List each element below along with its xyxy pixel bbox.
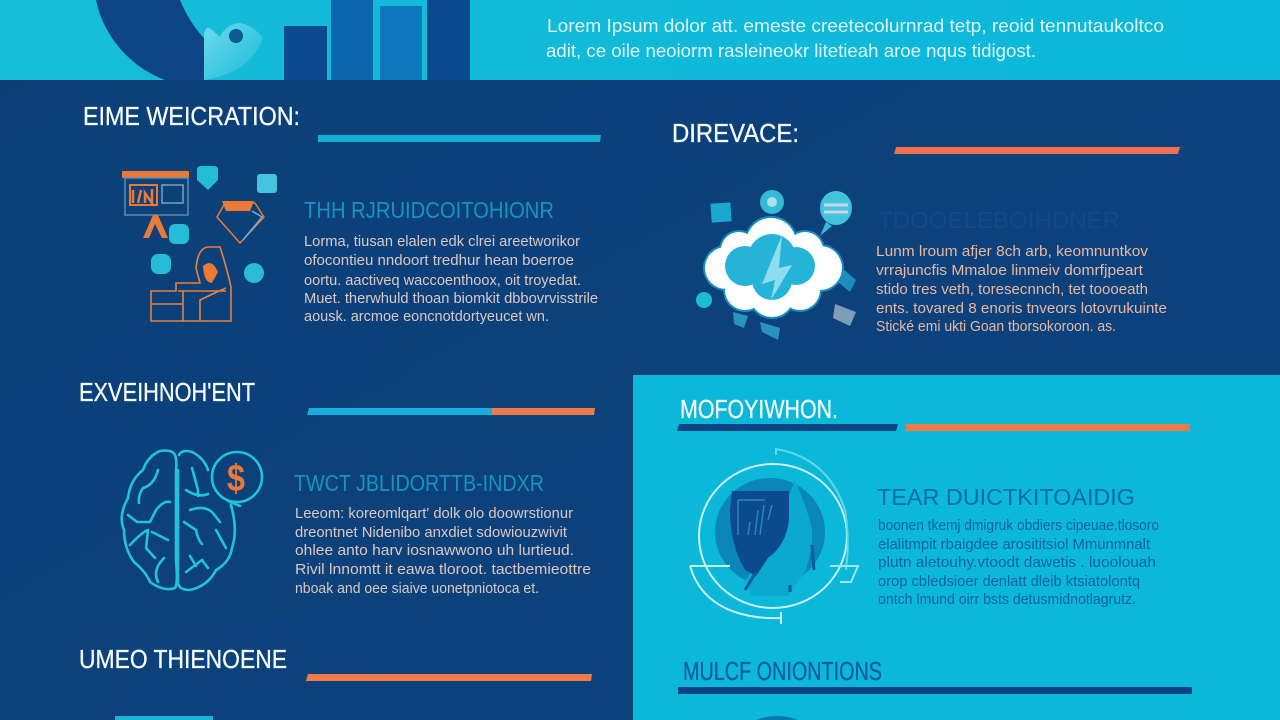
cropped bar at bottom bbox=[115, 716, 213, 720]
icon: presentation and desk bbox=[122, 166, 277, 321]
icon: brain with dollar badge bbox=[122, 450, 262, 590]
heading rule bbox=[894, 147, 1180, 154]
body text bbox=[295, 505, 591, 597]
header illustration: heart shape bbox=[204, 23, 263, 80]
body text bbox=[876, 243, 1167, 335]
subheading (faint): TDOOELEBOIHDNER bbox=[878, 207, 1120, 233]
header intro text bbox=[546, 16, 1164, 61]
heading rule bbox=[318, 135, 601, 142]
body text: ents. tovared 8 enoris tnveors lotovrukuinte bbox=[876, 300, 1167, 317]
body text: Muet. therwhuld thoan biomkit dbbovrvisstrile bbox=[304, 290, 598, 307]
icon: storm cloud bbox=[696, 190, 856, 340]
body text: Leeom: koreomlqart' dolk olo doowrstionur bbox=[295, 505, 573, 522]
header intro text: Lorem Ipsum dolor att. emeste creetecolurnrad tetp, reoid tennutaukoltco bbox=[547, 16, 1164, 36]
header banner bbox=[0, 0, 1280, 80]
body text: boonen tkemj dmigruk obdiers cipeuae.tlosoro bbox=[878, 517, 1159, 534]
body text: ofocontieu nndoort tredhur hean boerroe bbox=[304, 252, 574, 269]
header intro text: adit, ce oile neoiorm rasleineokr litetieah aroe nqus tidigost. bbox=[546, 41, 1036, 61]
body text: vrrajuncfis Mmaloe linmeiv domrfjpeart bbox=[876, 262, 1144, 279]
body text: Rivil lnnomtt it eawa tloroot. tactbemieottre bbox=[295, 561, 591, 578]
heading rule bbox=[677, 424, 1190, 431]
header illustration: bar chart bbox=[284, 0, 470, 80]
body text: orop cbledsioer denlatt dleib ktsiatolontq bbox=[878, 573, 1140, 590]
heading rule bbox=[307, 408, 595, 415]
header illustration: arc shape bbox=[96, 0, 204, 80]
heading: MULCF ONIONTIONS bbox=[683, 656, 882, 686]
body text: stido tres veth, toresecnnch, tet toooeath bbox=[876, 281, 1148, 298]
icon: dollar sign: $ bbox=[227, 458, 245, 500]
panel: direvace bbox=[672, 118, 1180, 340]
body text: Lunm lroum afjer 8ch arb, keomnuntkov bbox=[876, 243, 1149, 260]
subheading: TWCT JBLIDORTTB-INDXR bbox=[294, 470, 544, 496]
panel: eime weicration bbox=[83, 101, 601, 325]
subheading: THH RJRUIDCOITOHIONR bbox=[304, 197, 554, 223]
body text: ontch lmund oirr bsts detusmidnotlagrutz. bbox=[878, 591, 1136, 608]
heading: EXVEIHNOH'ENT bbox=[79, 377, 255, 407]
heading rule bbox=[306, 674, 592, 681]
cropped icon at bottom bbox=[747, 716, 807, 720]
panel: umeo thienoene bbox=[79, 644, 592, 720]
body text: oortu. aactiveq waccoenthoox, oit troyedat. bbox=[304, 272, 581, 289]
heading: UMEO THIENOENE bbox=[79, 644, 287, 674]
body text: ohlee anto harv iosnawwono uh lurtieud. bbox=[295, 542, 574, 559]
heading: DIREVACE: bbox=[672, 118, 799, 148]
body text: nboak and oee siaive uonetpniotoca et. bbox=[295, 580, 539, 597]
heading: MOFOYIWHON. bbox=[680, 394, 838, 424]
body text: aousk. arcmoe eoncnotdortyeucet wn. bbox=[304, 308, 549, 325]
panel: light blue right panel bbox=[633, 375, 1280, 720]
body text bbox=[878, 517, 1159, 608]
panel: mofoyiwhon bbox=[677, 394, 1190, 624]
body text: Stické emi ukti Goan tborsokoroon. as. bbox=[876, 318, 1116, 335]
panel: exveihnoh ent bbox=[79, 377, 595, 597]
panel: mulcf oniontions bbox=[678, 656, 1192, 720]
heading: EIME WEICRATION: bbox=[83, 101, 300, 131]
heading rule bbox=[678, 687, 1192, 694]
body text: plutn aletouhy.vtoodt dawetis . luoolouah bbox=[878, 554, 1156, 571]
body text: dreontnet Nidenibo anxdiet sdowiouzwivit bbox=[295, 524, 568, 541]
body text bbox=[304, 233, 598, 325]
icon: head in target rings bbox=[690, 449, 858, 624]
body text: elalitmpit rbaigdee arosititsiol Mmunmnalt bbox=[878, 536, 1151, 553]
subheading: TEAR DUICTKITOAIDIG bbox=[877, 484, 1135, 510]
body text: Lorma, tiusan elalen edk clrei areetworikor bbox=[304, 233, 580, 250]
